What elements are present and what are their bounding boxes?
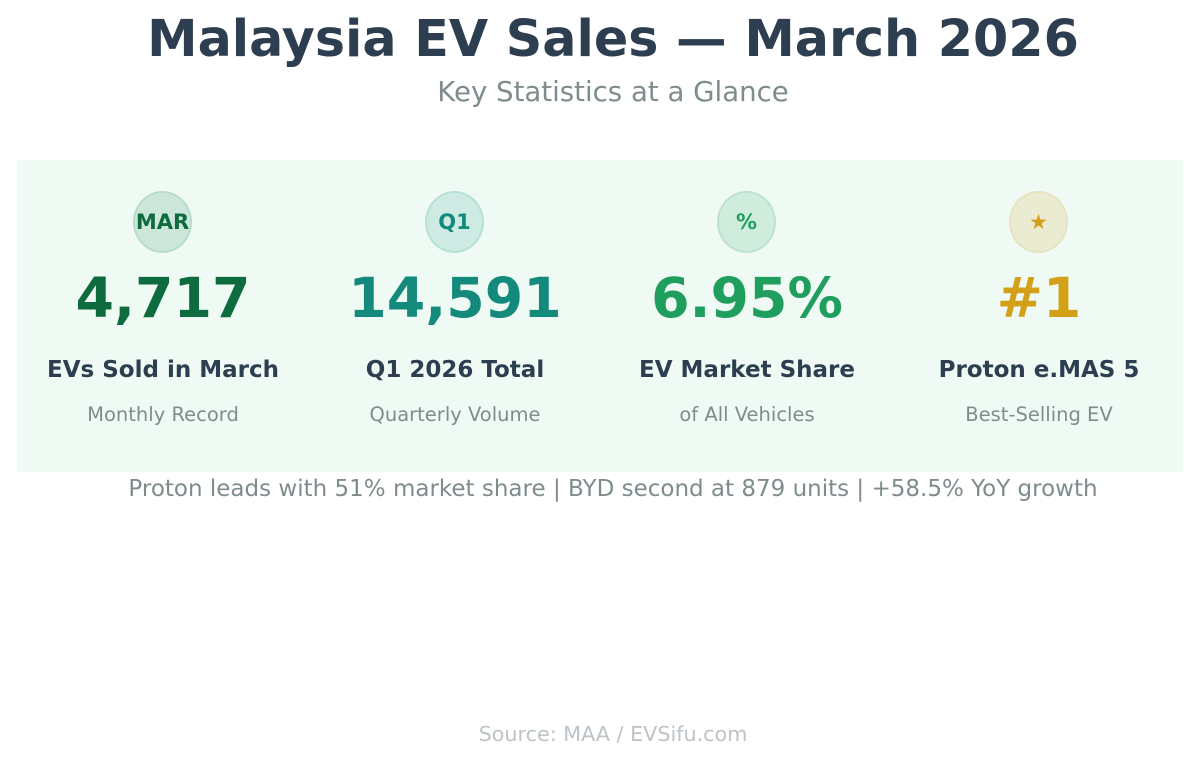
icon: star: [1009, 191, 1068, 253]
source: Source: MAA / EVSifu.com: [479, 722, 747, 746]
stat: monthly: [47, 191, 279, 426]
sublabel: Best-Selling EV: [965, 403, 1113, 426]
label: EVs Sold in March: [47, 357, 279, 383]
stat: best seller: [939, 191, 1139, 426]
icon: MAR: [133, 191, 192, 253]
sublabel: of All Vehicles: [679, 403, 815, 426]
label: EV Market Share: [639, 357, 855, 383]
icon: Q1: [425, 191, 484, 253]
icon: percent: [717, 191, 776, 253]
icon: percent: %: [736, 210, 757, 234]
stat: share: [639, 191, 855, 426]
subtitle: Key Statistics at a Glance: [437, 75, 789, 108]
summary line: Proton leads with 51% market share | BYD second at 879 units | +58.5% YoY growth: [128, 476, 1098, 502]
stat: quarterly: [348, 191, 562, 426]
title: Malaysia EV Sales — March 2026: [147, 9, 1079, 68]
number: 14,591: [348, 267, 562, 331]
label: Proton e.MAS 5: [939, 357, 1139, 383]
icon: star: ★: [1029, 210, 1048, 234]
icon: MAR: MAR: [136, 210, 189, 234]
panel: stats: [17, 160, 1183, 472]
icon: Q1: Q1: [438, 210, 471, 234]
sublabel: Monthly Record: [87, 403, 239, 426]
number: 4,717: [76, 267, 250, 331]
number: #1: [997, 267, 1081, 331]
sublabel: Quarterly Volume: [369, 403, 540, 426]
label: Q1 2026 Total: [366, 357, 544, 383]
number: 6.95%: [651, 267, 843, 331]
